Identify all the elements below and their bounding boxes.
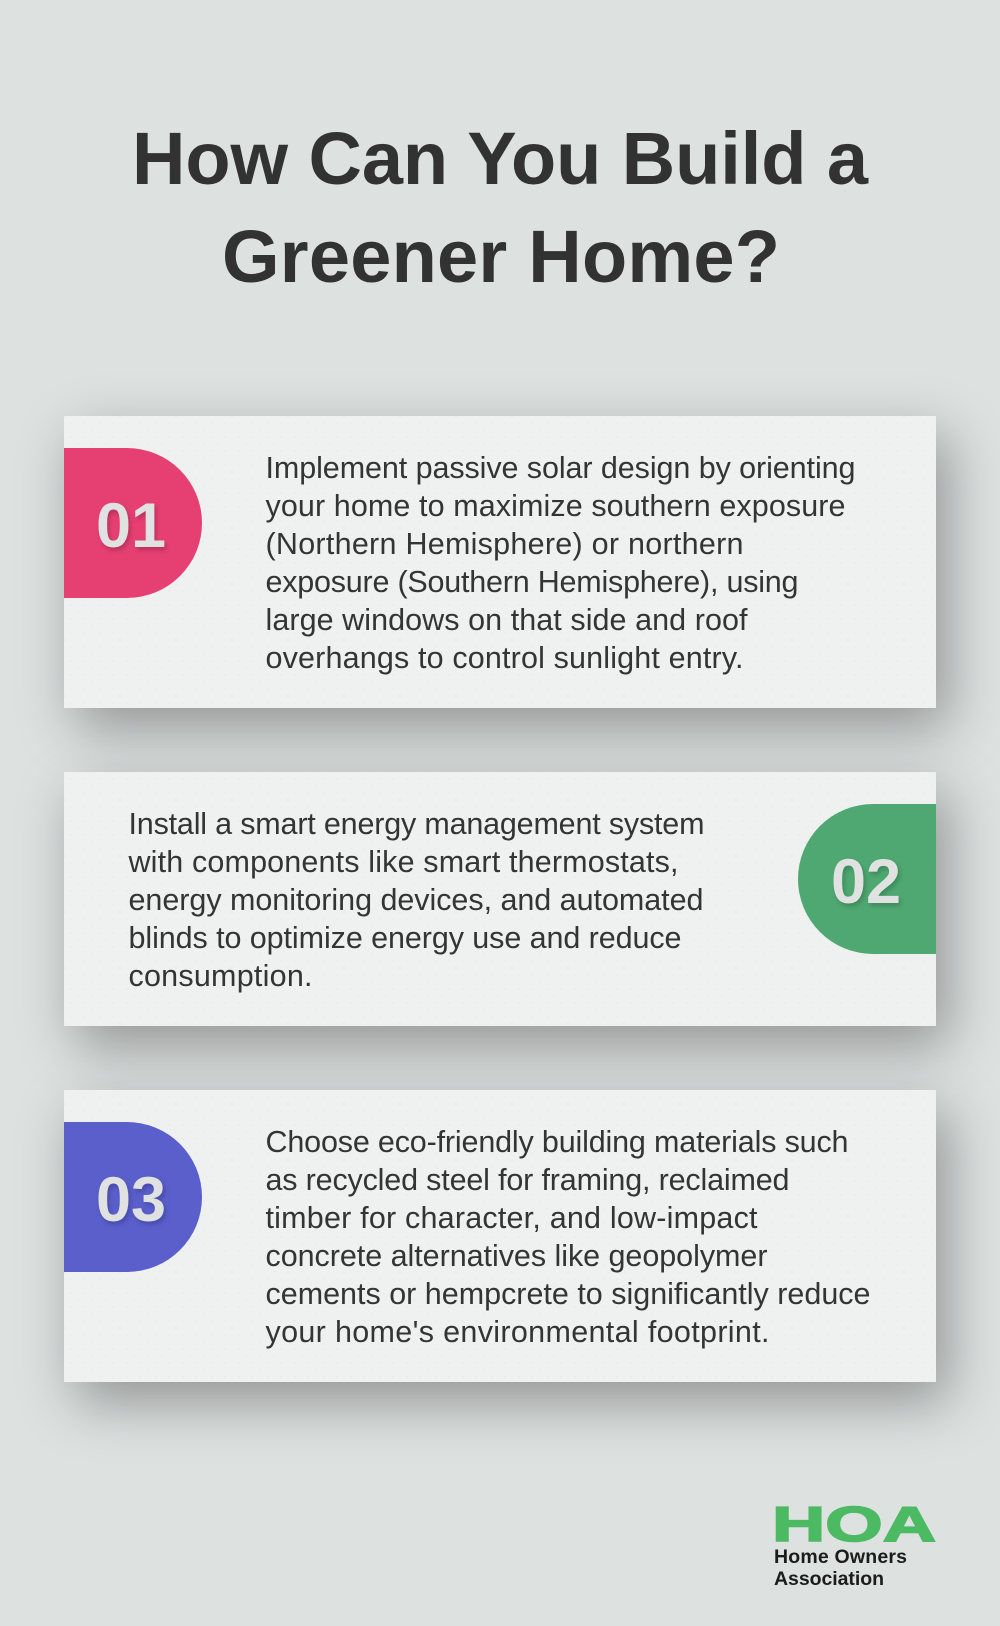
text block: step 01: Implement passive solar design by orienting bbox=[266, 451, 856, 485]
text block: step 02: blinds to optimize energy use and reduce bbox=[128, 921, 682, 955]
badge: 01 bbox=[64, 448, 202, 598]
text block: step 02: with components like smart thermostats, bbox=[128, 845, 678, 879]
text block: step 03: your home's environmental footprint. bbox=[266, 1315, 770, 1349]
text block: step 01 bbox=[266, 451, 856, 675]
text block: step 03: concrete alternatives like geopolymer bbox=[266, 1239, 768, 1273]
logo: HOA Home Owners Association bbox=[772, 1498, 936, 1590]
logo tagline: Association bbox=[774, 1568, 884, 1590]
text block: step 02: consumption. bbox=[128, 959, 312, 993]
number 03: 03 bbox=[96, 1165, 166, 1235]
text block: step 01: overhangs to control sunlight entry. bbox=[266, 641, 744, 675]
logo tagline bbox=[774, 1546, 907, 1590]
badge: 02 bbox=[798, 804, 936, 954]
text block: step 01: exposure (Southern Hemisphere), using bbox=[266, 565, 798, 599]
text block: step 01: (Northern Hemisphere) or northern bbox=[266, 527, 744, 561]
text block: step 01: large windows on that side and roof bbox=[266, 603, 748, 637]
title: How Can You Build a bbox=[132, 117, 869, 200]
number 01: 01 bbox=[96, 491, 166, 561]
title: Greener Home? bbox=[222, 215, 780, 298]
text block: step 02: Install a smart energy management system bbox=[128, 807, 704, 841]
panel: step 02 smart energy system bbox=[64, 772, 936, 1026]
text block: step 03: cements or hempcrete to significantly reduce bbox=[266, 1277, 870, 1311]
logo tagline: Home Owners bbox=[774, 1546, 907, 1568]
text block: step 02 bbox=[128, 807, 704, 993]
title bbox=[132, 117, 869, 298]
text block: step 03: timber for character, and low-impact bbox=[266, 1201, 758, 1235]
number 02: 02 bbox=[831, 847, 901, 917]
badge: 03 bbox=[64, 1122, 202, 1272]
text block: step 03: as recycled steel for framing, reclaimed bbox=[266, 1163, 790, 1197]
text block: step 02: energy monitoring devices, and automated bbox=[128, 883, 704, 917]
text block: step 01: your home to maximize southern exposure bbox=[266, 489, 846, 523]
panel: step 03 eco-friendly materials bbox=[64, 1090, 936, 1382]
text block: step 03: Choose eco-friendly building materials such bbox=[266, 1125, 848, 1159]
text block: step 03 bbox=[266, 1125, 870, 1349]
panel: step 01 passive solar design bbox=[64, 416, 936, 708]
logo wordmark: HOA bbox=[772, 1498, 936, 1552]
